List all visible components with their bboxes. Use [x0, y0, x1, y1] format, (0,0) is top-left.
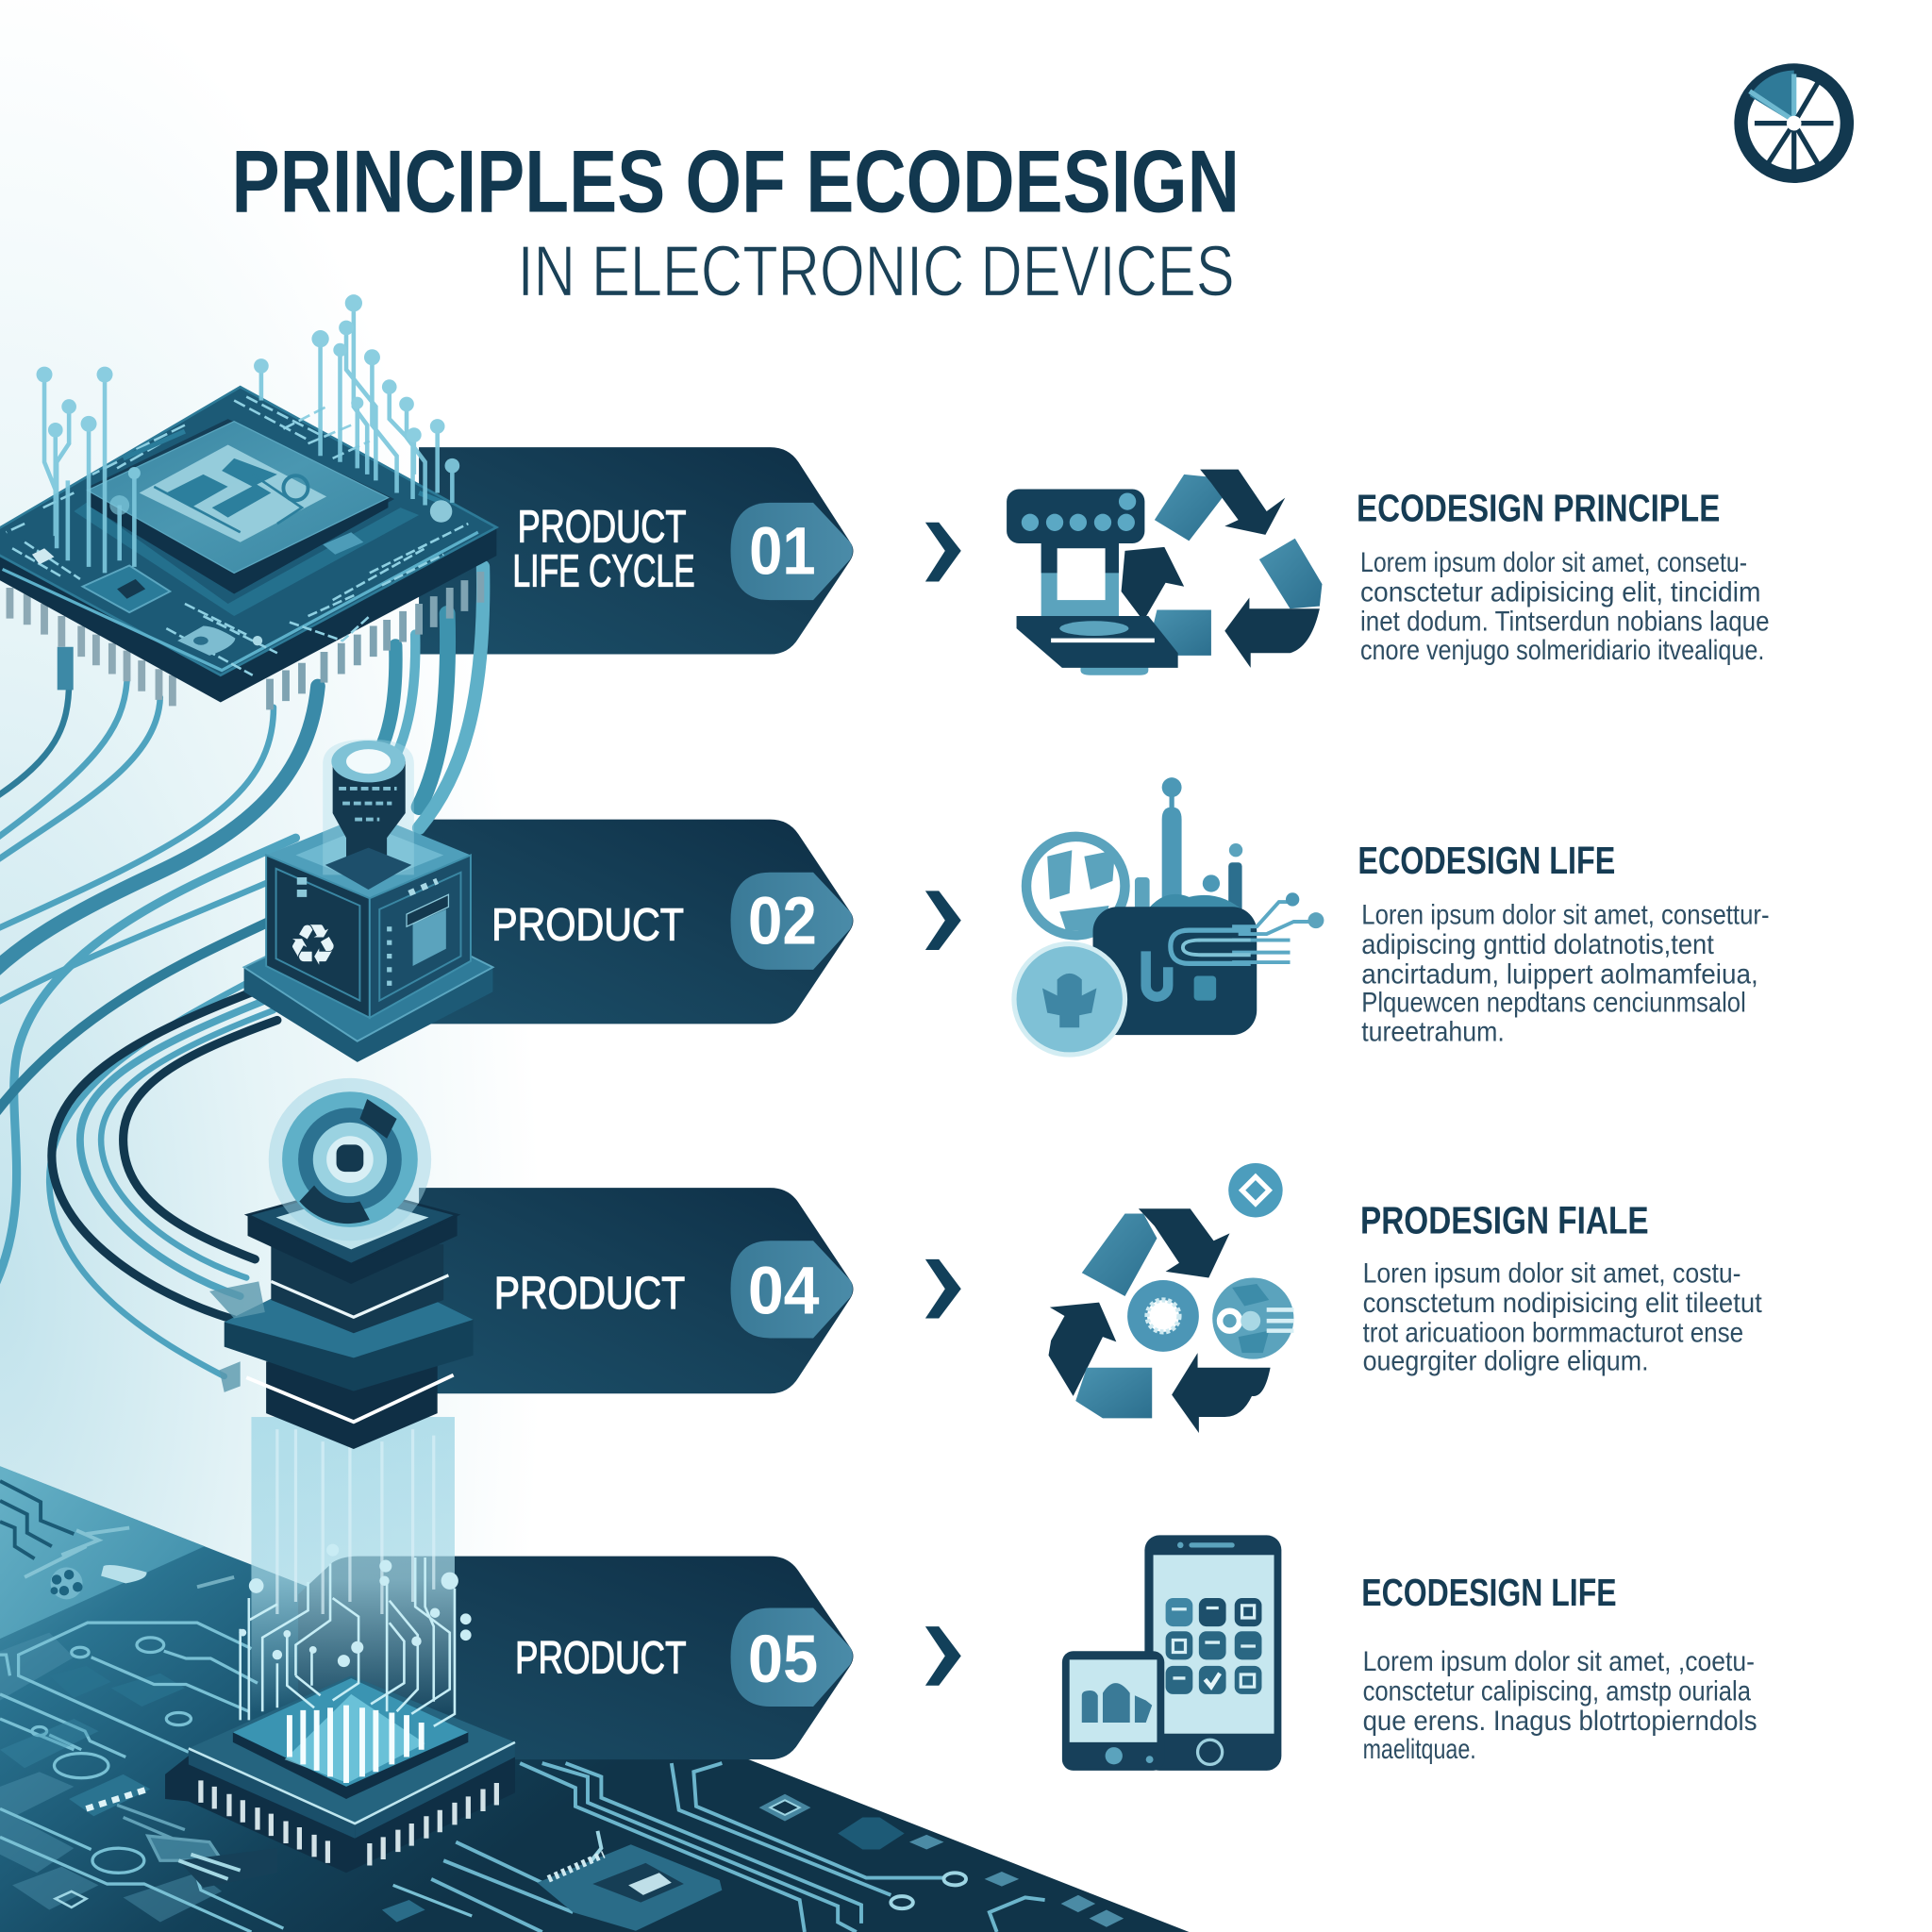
text: ecodesign principle: inet dodum. Tintserdun nobians laque — [1360, 607, 1770, 638]
text: ecodesign life second: consctetur calipiscing, amstp ouriala — [1363, 1675, 1751, 1707]
text: ecodesign principle: Lorem ipsum dolor sit amet, consetu- — [1360, 547, 1747, 578]
text: ecodesign principle: ECODESIGN PRINCIPLE — [1357, 486, 1720, 529]
inner plate — [88, 422, 388, 594]
text: prodesign fiale: Loren ipsum dolor sit amet, costu- — [1363, 1258, 1741, 1290]
title: PRINCIPLES OF ECODESIGN — [232, 132, 1240, 231]
text: prodesign fiale: trot aricuatioon bormmacturot ense — [1363, 1317, 1743, 1348]
icon: recycle on box: ♻ — [288, 914, 339, 977]
text: ecodesign principle — [1357, 486, 1770, 666]
banner 05: 05 — [748, 1622, 818, 1697]
probe lines and dots — [37, 294, 459, 573]
icon 1: machine and recycling arrows — [1007, 470, 1322, 675]
chip 01: processor — [0, 294, 496, 709]
icon: logo wheel — [1741, 70, 1847, 176]
arrow 1 — [925, 523, 961, 581]
text: prodesign fiale: ouegrgiter doligre eliqum. — [1363, 1345, 1649, 1376]
lens — [323, 740, 414, 890]
banner 02: PRODUCT — [491, 900, 684, 951]
banner 01: PRODUCT — [518, 502, 687, 553]
banner 02: 02 — [748, 883, 817, 958]
text: ecodesign principle: consctetur adipisicing elit, tincidim — [1360, 576, 1760, 608]
cables — [0, 567, 483, 1376]
beam of light — [251, 1417, 455, 1713]
text: ecodesign life: ancirtadum, luippert aolmamfeiua, — [1361, 958, 1758, 990]
text: ecodesign principle: cnore venjugo solmeridiario itvealique. — [1360, 635, 1764, 666]
text: ecodesign life: Plquewcen nepdtans cenciunmsalol — [1361, 987, 1746, 1018]
circuit board floor — [0, 1466, 1189, 1932]
banner 01: 01 — [749, 514, 816, 590]
banner 01: LIFE CYCLE — [512, 546, 695, 597]
text: ecodesign life — [1357, 839, 1770, 1048]
banner 05: PRODUCT — [515, 1633, 687, 1684]
text: ecodesign life: adipiscing gnttid dolatnotis,tent — [1361, 929, 1714, 960]
text: prodesign fiale: PRODESIGN FIALE — [1360, 1198, 1649, 1241]
icon 2: globe, person and device — [1014, 777, 1324, 1055]
banner 01 — [419, 447, 853, 655]
text: ecodesign life: Loren ipsum dolor sit amet, consettur- — [1361, 900, 1770, 931]
banner 04 — [419, 1188, 853, 1393]
chip 04: stacked module — [209, 1078, 474, 1449]
text: ecodesign life: tureetrahum. — [1361, 1017, 1505, 1048]
floor components — [0, 1565, 425, 1923]
app grid — [1166, 1598, 1261, 1694]
arrow 2 — [925, 891, 961, 950]
arrow 4 — [925, 1626, 961, 1686]
text: ecodesign life second: que erens. Inagus blotrtopierndols — [1363, 1706, 1757, 1737]
text: ecodesign life second: maelitquae. — [1363, 1734, 1476, 1765]
text: ecodesign life second — [1361, 1571, 1757, 1765]
pins — [9, 572, 480, 709]
arrow 3 — [925, 1259, 961, 1319]
text: ecodesign life second: ECODESIGN LIFE — [1361, 1571, 1617, 1614]
banner 04: 04 — [748, 1253, 820, 1328]
banner 04: PRODUCT — [494, 1268, 685, 1319]
icon 4: phone and tablet — [1062, 1535, 1281, 1771]
banner 02 — [419, 820, 853, 1024]
chip 02: box module — [244, 740, 492, 1062]
text: ecodesign life second: Lorem ipsum dolor sit amet, ,coetu- — [1363, 1646, 1755, 1677]
title: IN ELECTRONIC DEVICES — [518, 231, 1235, 311]
text: prodesign fiale — [1360, 1198, 1762, 1376]
circuit tree — [239, 1544, 472, 1726]
board details — [7, 397, 468, 675]
traces — [0, 1623, 472, 1932]
icon 3: recycling loop with earth — [1049, 1163, 1293, 1433]
lens sphere — [269, 1078, 431, 1241]
banner 05 — [298, 1557, 853, 1759]
text: prodesign fiale: consctetum nodipisicing elit tileetut — [1363, 1288, 1762, 1319]
chip 05: glowing processor — [165, 1544, 515, 1873]
text: ecodesign life: ECODESIGN LIFE — [1357, 839, 1615, 882]
small chip on floor — [537, 1831, 722, 1931]
title — [232, 132, 1240, 311]
